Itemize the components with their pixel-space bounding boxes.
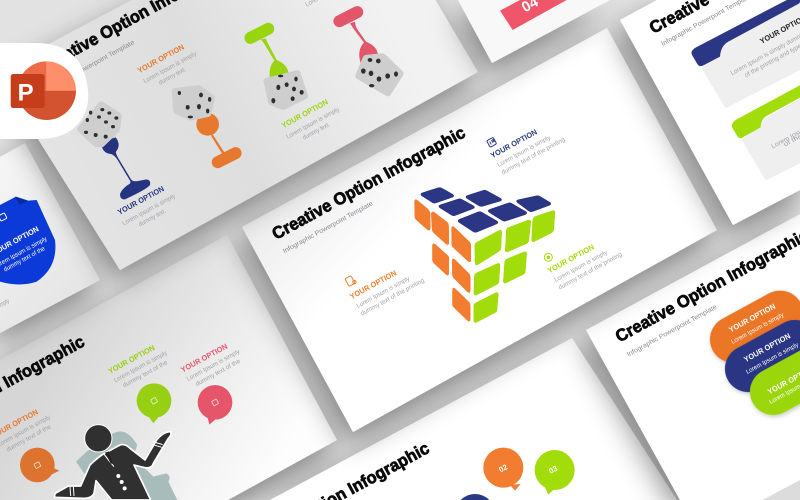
option text: navy bbox=[489, 117, 567, 177]
option text: orange: dummy text of the printing bbox=[360, 277, 426, 317]
pill: orange: YOUR OPTION bbox=[727, 302, 777, 334]
option text: navy bbox=[115, 181, 181, 235]
bubble 02 bbox=[483, 448, 523, 491]
option text: navy: dummy text. bbox=[138, 208, 168, 228]
card: green bbox=[732, 82, 800, 180]
card: green: of the bbox=[783, 132, 800, 148]
cube chart bbox=[415, 187, 555, 323]
option text: green: dummy text of the bbox=[122, 359, 169, 389]
option text: orange bbox=[348, 258, 426, 318]
blue shield badge bbox=[0, 197, 55, 284]
slide subtitle: Infographic Powerpoint Template bbox=[626, 304, 719, 358]
pill: green bbox=[742, 335, 800, 423]
die 4 bbox=[357, 55, 402, 95]
option text: green: dummy text. bbox=[302, 121, 332, 142]
chair bbox=[76, 432, 177, 500]
icon: PowerPoint logo badge: P bbox=[18, 79, 34, 106]
goblet: navy bbox=[102, 137, 150, 199]
option text: orange bbox=[0, 403, 57, 456]
option text: red: YOUR OPTION bbox=[179, 342, 229, 374]
die 3 bbox=[265, 72, 307, 108]
option text: green: dummy text of the printing bbox=[557, 251, 624, 291]
goblet: orange bbox=[196, 113, 244, 170]
speech bubble: red bbox=[198, 385, 232, 425]
option text: orange: YOUR OPTION bbox=[348, 268, 398, 301]
pill: navy bbox=[717, 312, 800, 400]
option text: navy: dummy text of the printing bbox=[500, 136, 567, 176]
option text: green bbox=[107, 339, 173, 392]
panel: blue shield slide bbox=[0, 143, 100, 333]
icon: target green bbox=[544, 253, 552, 261]
icon: document orange bbox=[345, 275, 357, 287]
panel: dice slide bbox=[0, 0, 478, 270]
slide subtitle: Infographic Powerpoint Template bbox=[43, 39, 136, 94]
option text: red: dummy text of the bbox=[194, 358, 242, 388]
goblet: green bbox=[242, 21, 289, 78]
slide subtitle: Infographic Powerpoint Template bbox=[282, 200, 375, 255]
goblet: red bbox=[331, 4, 378, 63]
icon: calendar navy bbox=[487, 137, 497, 147]
option text: navy: YOUR OPTION bbox=[489, 127, 539, 160]
option text: green: Lorem Ipsum is simply bbox=[113, 349, 169, 384]
panel: cube slide bbox=[242, 28, 717, 432]
icon: shield glyph bbox=[0, 213, 7, 221]
option text: green: YOUR OPTION bbox=[546, 242, 596, 275]
option text: navy: Lorem Ipsum is simply bbox=[121, 192, 177, 227]
option text: navy: YOUR OPTION bbox=[116, 184, 166, 217]
bubble 02: 02 bbox=[497, 462, 509, 474]
option body line 2: dummy text of the bbox=[3, 245, 47, 273]
option text: green: Lorem Ipsum is simply bbox=[285, 106, 341, 141]
shield fold bbox=[15, 197, 27, 205]
option text: orange: dummy text. bbox=[158, 66, 188, 87]
panel: stacked pills slide bbox=[586, 214, 800, 500]
businessman figure bbox=[55, 425, 171, 500]
panel: numbered bubbles slide bbox=[233, 338, 677, 500]
option text: navy: Lorem Ipsum is simply bbox=[496, 134, 552, 169]
option text: green: Lorem Ipsum is simply bbox=[553, 249, 609, 284]
option text: red: Lorem Ipsum is simply bbox=[186, 348, 242, 383]
panel: tabbed cards slide bbox=[620, 0, 800, 225]
option text: orange: YOUR OPTION bbox=[136, 42, 186, 75]
pill: navy: YOUR OPTION bbox=[742, 331, 792, 364]
slide title: Creative Option Infographic bbox=[269, 123, 468, 244]
panel: businessman slide bbox=[0, 235, 337, 500]
option text: orange: Lorem Ipsum is simply bbox=[142, 50, 198, 85]
pill: orange: Lorem Ipsum is simply bbox=[730, 311, 786, 346]
bubble 03: 03 bbox=[547, 464, 559, 476]
die 1 bbox=[78, 103, 120, 146]
option text: green bbox=[546, 232, 624, 292]
pill: orange bbox=[702, 282, 800, 371]
bubble 03 bbox=[535, 450, 575, 495]
die 2 bbox=[173, 87, 213, 119]
option text: green: YOUR OPTION bbox=[107, 343, 157, 376]
option text: orange bbox=[136, 38, 203, 93]
red number band bbox=[500, 0, 567, 30]
option text: orange: Lorem Ipsum is simply bbox=[356, 275, 412, 310]
option text: orange: dummy text of the bbox=[5, 423, 53, 454]
card: navy bbox=[691, 0, 800, 108]
panel: red number slide bbox=[458, 0, 610, 63]
speech bubble: green bbox=[137, 383, 171, 423]
option text: red bbox=[179, 337, 246, 391]
speech bubble: orange bbox=[20, 448, 59, 482]
option text: green bbox=[279, 94, 345, 148]
bubble 01 bbox=[455, 494, 495, 500]
icon: PowerPoint logo badge bbox=[0, 43, 88, 139]
option text: green: YOUR OPTION bbox=[280, 97, 330, 130]
